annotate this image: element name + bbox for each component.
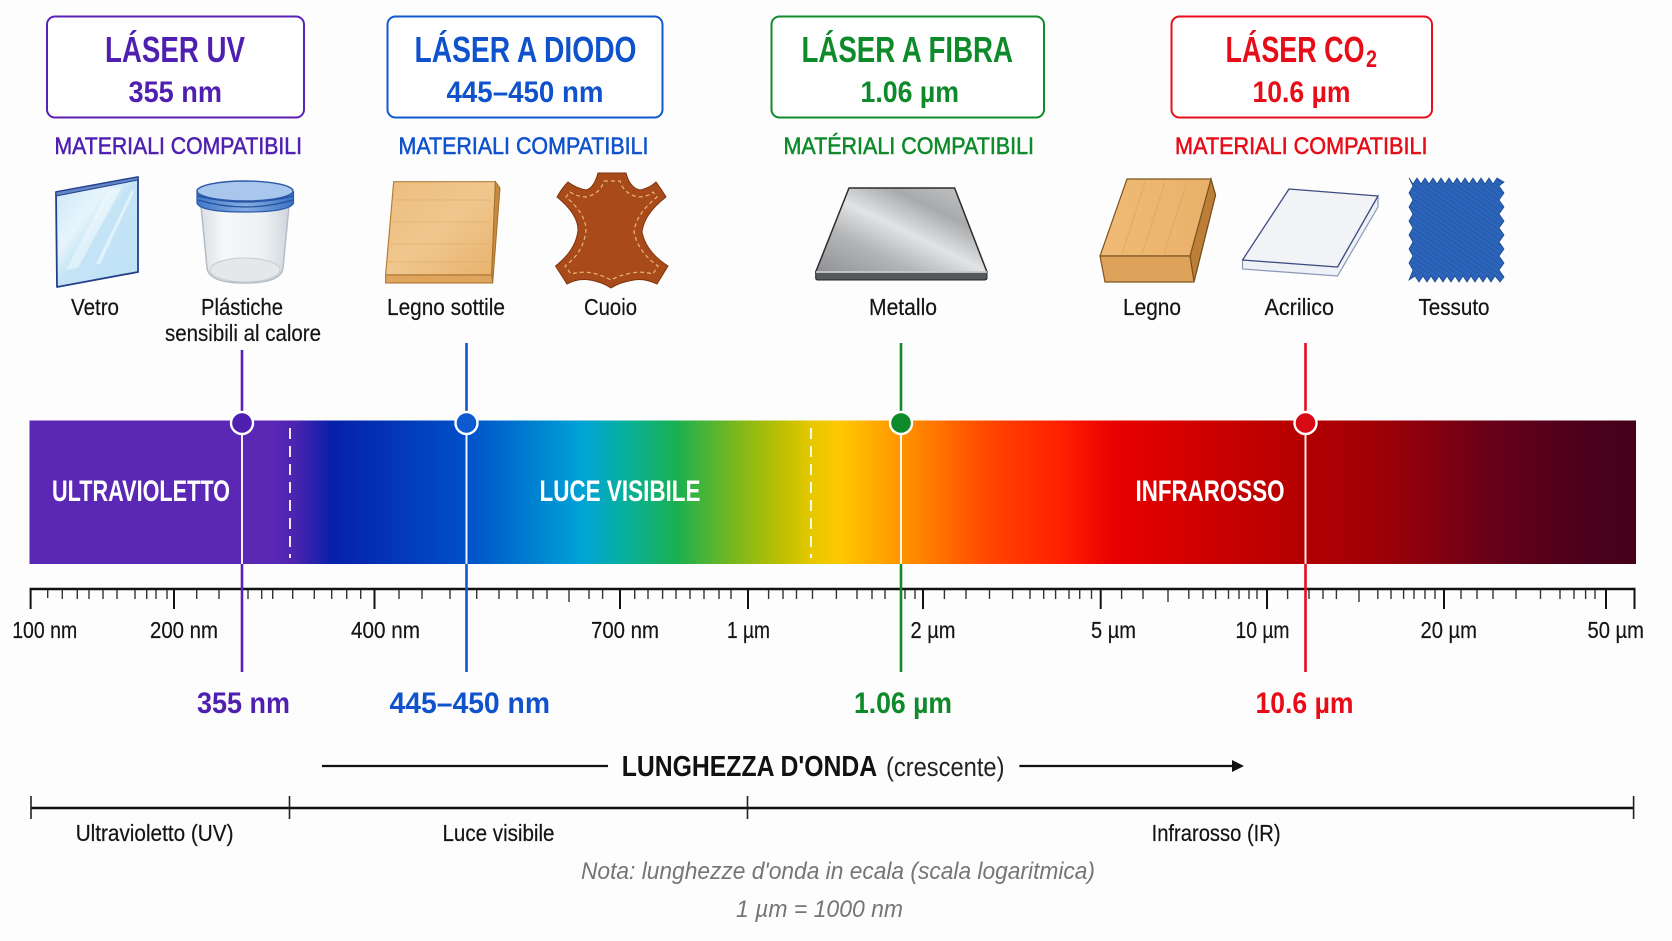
chart: spectral region span	[31, 796, 1634, 846]
label: Plastiche sensibili al calore	[165, 294, 321, 346]
marker: diode 445–450 nm	[456, 343, 478, 672]
label: Legno sottile: Legno sottile	[387, 294, 505, 320]
arrow: increasing wavelength	[322, 751, 1244, 783]
panel: fiber laser header: 1.06 µm	[860, 76, 959, 109]
panel: CO2 laser header: LÁSER CO	[1226, 29, 1364, 70]
marker: fiber 1.06 µm	[890, 343, 912, 672]
ruler labels: 5 µm	[1091, 617, 1136, 643]
value: 1.06 µm: 1.06 µm	[854, 687, 952, 720]
icon: fabric swatch	[1409, 178, 1504, 282]
note: Nota: lunghezze d'onda in ecala (scala logaritmica)	[581, 858, 1095, 885]
panel: CO2 laser header	[1172, 16, 1432, 118]
label: Cuoio: Cuoio	[584, 294, 637, 320]
ruler labels: 400 nm	[351, 617, 420, 643]
heading: diode compatible materials: MATERIALI COMPATIBILI	[398, 133, 648, 160]
label: Vetro: Vetro	[71, 294, 119, 320]
label: Plastiche sensibili al calore: Plástiche	[201, 294, 283, 320]
arrow: increasing wavelength: LUNGHEZZA D'ONDA	[622, 751, 877, 783]
heading: CO2 compatible materials: MATERIALI COMPATIBILI	[1175, 133, 1428, 160]
marker: CO2 10.6 µm	[1294, 343, 1316, 672]
chart: spectral region span: Infrarosso (IR)	[1152, 820, 1281, 846]
panel: CO2 laser header: 2	[1366, 46, 1377, 73]
icon: thin wood	[386, 182, 500, 283]
panel: UV laser header: 355 nm	[128, 76, 222, 109]
chart: spectrum bar: INFRAROSSO	[1136, 475, 1284, 508]
ruler labels: 2 µm	[910, 617, 956, 643]
chart: spectrum bar: ULTRAVIOLETTO	[52, 475, 230, 508]
note	[581, 858, 1095, 923]
icon: leather hide	[556, 173, 668, 288]
ruler labels	[12, 617, 1644, 643]
chart: wavelength ruler	[30, 589, 1636, 609]
ruler labels: 50 µm	[1588, 617, 1644, 643]
value: 10.6 µm: 10.6 µm	[1256, 687, 1354, 720]
ruler labels: 700 nm	[591, 617, 659, 643]
heading: fiber compatible materials: MATÉRIALI COMPATIBILI	[784, 133, 1034, 160]
note: 1 µm = 1000 nm	[736, 896, 903, 923]
panel: UV laser header: LÁSER UV	[105, 29, 245, 70]
icon: glass pane	[56, 177, 138, 287]
panel: UV laser header	[47, 16, 304, 118]
label: Legno: Legno	[1123, 294, 1181, 320]
ruler labels: 200 nm	[150, 617, 218, 643]
ruler labels: 20 µm	[1420, 617, 1477, 643]
ruler labels: 10 µm	[1236, 617, 1290, 643]
icon: acrylic sheet	[1242, 189, 1378, 276]
arrow: increasing wavelength: (crescente)	[886, 752, 1004, 782]
panel: diode laser header: LÁSER A DIODO	[414, 29, 636, 70]
marker: UV 355 nm	[231, 350, 253, 672]
ruler labels: 100 nm	[12, 617, 77, 643]
chart: spectrum bar	[30, 420, 1636, 564]
panel: diode laser header: 445–450 nm	[446, 76, 604, 109]
icon: metal plate	[816, 188, 987, 280]
label: Plastiche sensibili al calore: sensibili al calore	[165, 320, 321, 346]
chart: spectral region span: Luce visibile	[442, 820, 554, 846]
value: 445–450 nm: 445–450 nm	[390, 687, 550, 720]
label: Acrilico: Acrilico	[1264, 294, 1334, 320]
value: 355 nm: 355 nm	[197, 687, 290, 720]
ruler labels: 1 µm	[727, 617, 770, 643]
panel: fiber laser header	[772, 16, 1044, 118]
icon: plastic cup	[197, 181, 294, 283]
heading: UV compatible materials: MATERIALI COMPATIBILI	[54, 133, 302, 160]
chart: spectral region span: Ultravioletto (UV)	[76, 820, 234, 846]
panel: CO2 laser header: 10.6 µm	[1252, 76, 1350, 109]
icon: wood block	[1100, 179, 1216, 282]
panel: fiber laser header: LÁSER A FIBRA	[802, 29, 1013, 70]
panel: diode laser header	[388, 16, 662, 118]
label: Metallo: Metallo	[869, 294, 937, 320]
label: Tessuto: Tessuto	[1418, 294, 1490, 320]
chart: spectrum bar: LUCE VISIBILE	[540, 475, 700, 508]
